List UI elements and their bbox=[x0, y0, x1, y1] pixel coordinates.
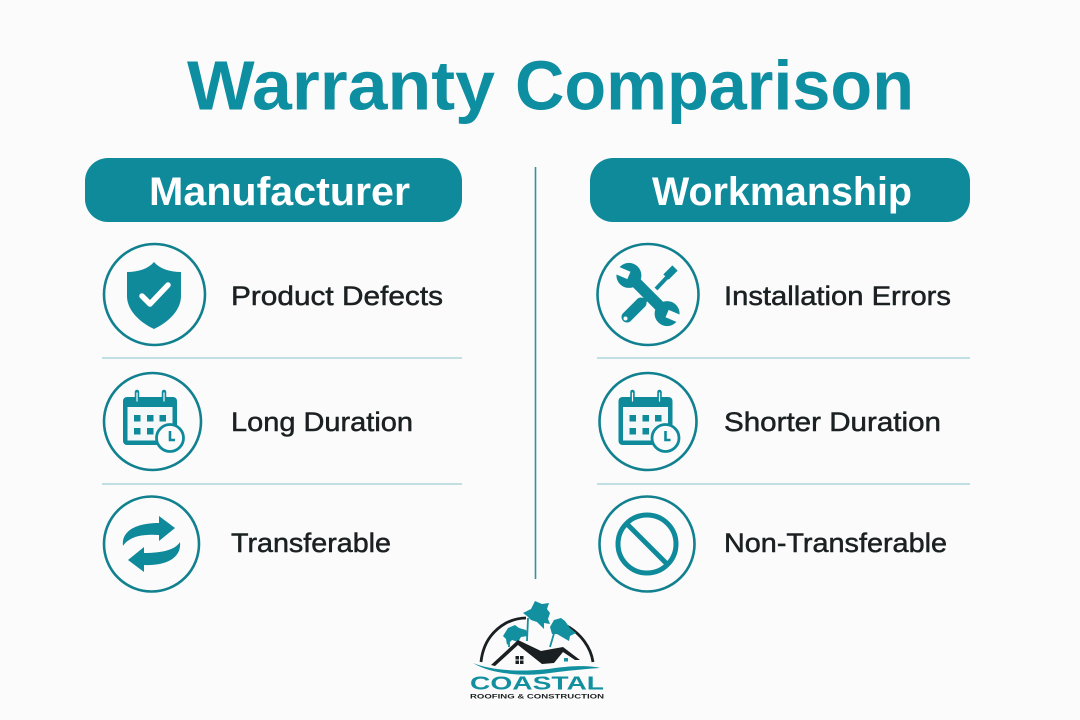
label: product defects: Product Defects bbox=[231, 281, 443, 311]
label: transferable: Transferable bbox=[231, 528, 391, 558]
icon: transfer arrows bbox=[104, 496, 199, 592]
logo wave bbox=[473, 663, 600, 675]
logo tagline: ROOFING & CONSTRUCTION bbox=[470, 694, 604, 700]
heading: workmanship bbox=[590, 158, 970, 222]
logo arc bbox=[481, 618, 593, 662]
logo: coastal roofing and construction bbox=[470, 601, 604, 700]
label: installation errors: Installation Errors bbox=[724, 281, 951, 311]
panel: manufacturer bbox=[85, 158, 462, 592]
heading: manufacturer bbox=[85, 158, 462, 222]
logo palm trees bbox=[503, 601, 576, 647]
title: Comparison bbox=[515, 46, 914, 124]
icon: calendar with clock bbox=[104, 373, 201, 470]
label: long duration: Long Duration bbox=[231, 407, 413, 437]
icon: calendar with clock bbox=[600, 373, 696, 470]
heading: workmanship: Workmanship bbox=[652, 170, 912, 214]
logo house bbox=[491, 640, 580, 668]
panel: workmanship bbox=[590, 158, 970, 592]
icon: shield with check bbox=[104, 244, 205, 345]
icon: prohibited sign bbox=[600, 496, 694, 592]
icon: wrench and screwdriver bbox=[598, 244, 698, 345]
title: Warranty bbox=[187, 46, 495, 124]
heading: manufacturer: Manufacturer bbox=[149, 170, 410, 214]
label: shorter duration: Shorter Duration bbox=[724, 407, 941, 437]
label: non-transferable: Non-Transferable bbox=[724, 528, 947, 558]
center divider bbox=[534, 167, 536, 579]
logo name: COASTAL bbox=[470, 674, 604, 694]
